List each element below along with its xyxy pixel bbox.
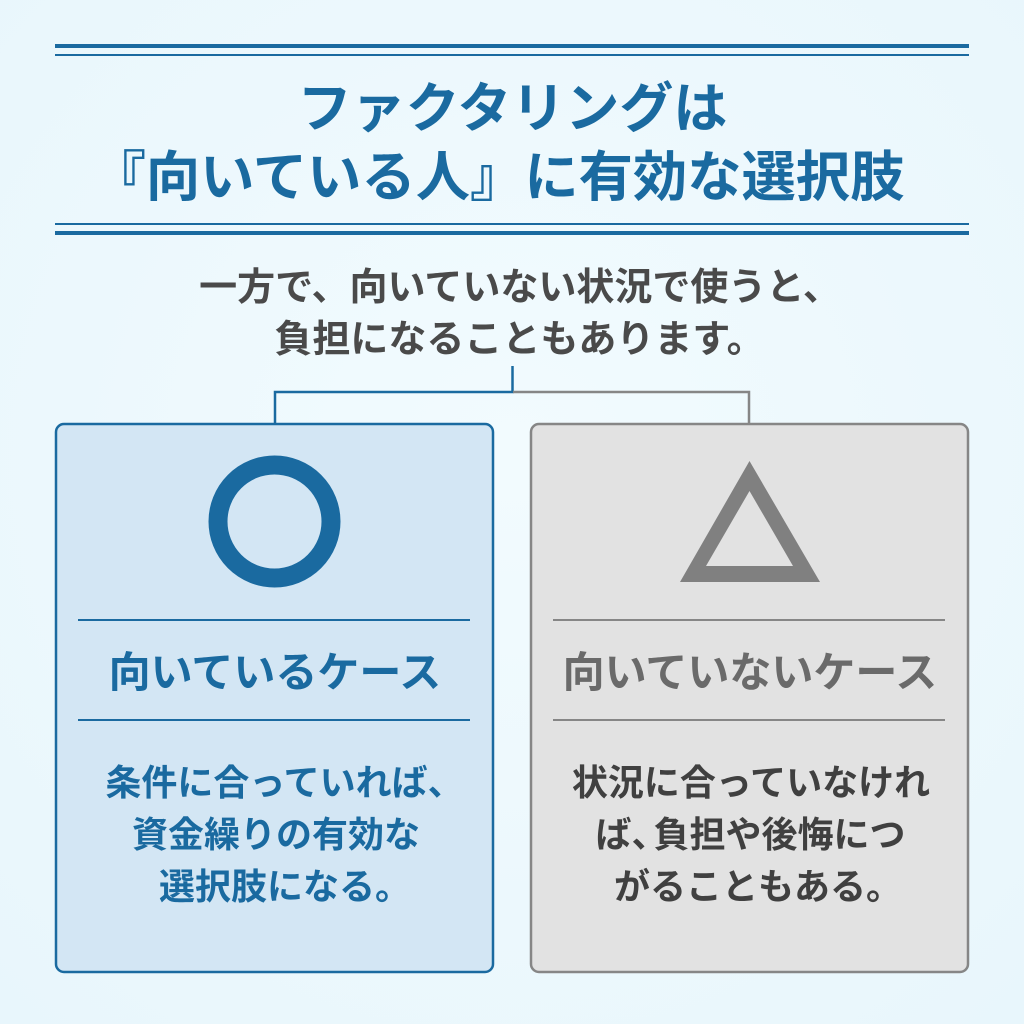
title block — [55, 44, 969, 235]
panel body text: ば、負担や後悔につ — [595, 814, 906, 855]
title text — [92, 79, 904, 208]
title text: 『向いている人』に有効な選択肢 — [92, 147, 904, 208]
connector: to unsuitable case — [513, 392, 749, 424]
panel body text: 状況に合っていなけれ — [572, 762, 930, 803]
icon: circle — [218, 465, 331, 578]
panel heading: 向いていないケース — [563, 649, 937, 696]
connector: to suitable case — [275, 366, 512, 424]
intro text — [199, 267, 841, 361]
panel: suitable case — [56, 424, 493, 972]
icon: triangle — [680, 461, 820, 582]
panel body text: がることもある。 — [614, 866, 902, 907]
title text: ファクタリングは — [298, 79, 727, 139]
panel body text: 資金繰りの有効な — [132, 814, 420, 855]
panel body text — [105, 762, 464, 907]
panel heading: 向いているケース — [109, 649, 441, 696]
panel body text — [572, 762, 930, 907]
intro text: 一方で、向いていない状況で使うと、 — [199, 267, 841, 309]
panel body text: 条件に合っていれば、 — [105, 762, 464, 803]
intro text: 負担になることもあります。 — [274, 319, 765, 361]
panel: unsuitable case — [531, 424, 968, 972]
panel body text: 選択肢になる。 — [159, 866, 411, 907]
